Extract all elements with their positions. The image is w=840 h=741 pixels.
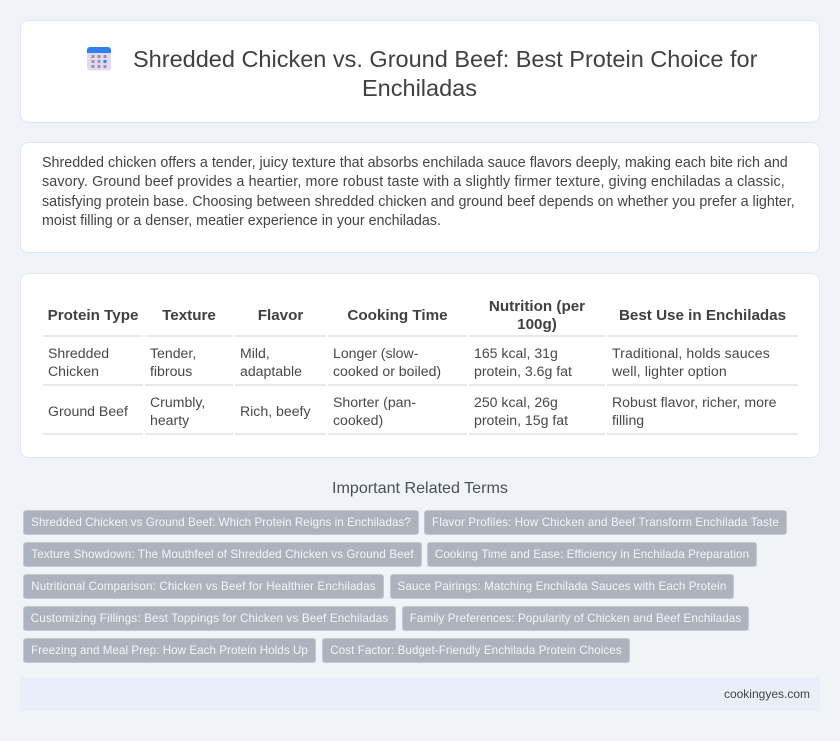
tag: Freezing and Meal Prep: How Each Protein Holds Up (31, 644, 308, 657)
row: shredded chicken: Traditional, holds sauces (612, 345, 770, 361)
row: shredded chicken: Longer (slow- (333, 345, 418, 361)
icon: calendar (87, 47, 111, 70)
row: ground beef: hearty (150, 412, 189, 428)
title: Enchiladas (362, 75, 477, 101)
description text (42, 155, 795, 229)
table header: Protein Type (48, 307, 138, 324)
row: shredded chicken: Tender, (150, 345, 196, 361)
row: ground beef: cooked) (333, 412, 383, 428)
row: shredded chicken: fibrous (150, 363, 192, 379)
row: shredded chicken: adaptable (240, 363, 302, 379)
row: ground beef: Rich, beefy (240, 403, 311, 419)
row: shredded chicken (48, 345, 770, 379)
tag (23, 638, 316, 663)
row: shredded chicken: Chicken (48, 363, 99, 379)
panel: description (20, 142, 820, 253)
tag (402, 606, 749, 631)
tag: Family Preferences: Popularity of Chicken and Beef Enchiladas (410, 612, 741, 625)
row: shredded chicken: Shredded (48, 345, 109, 361)
panel: comparison table (20, 273, 820, 458)
row: ground beef: Ground Beef (48, 403, 128, 419)
table header: Nutrition (per (489, 298, 585, 315)
table header: Cooking Time (347, 307, 448, 324)
tag: Customizing Fillings: Best Toppings for Chicken vs Beef Enchiladas (31, 612, 388, 625)
tag (23, 510, 419, 535)
table header: Flavor (258, 307, 303, 324)
description text: satisfying protein base. Choosing between shredded chicken and ground beef depends on whether you prefer a lighter, (42, 194, 795, 210)
row: shredded chicken: 165 kcal, 31g (474, 345, 558, 361)
tag: Cost Factor: Budget-Friendly Enchilada Protein Choices (330, 644, 622, 657)
tag (23, 574, 384, 599)
tag (23, 542, 422, 567)
tag (390, 574, 734, 599)
row: ground beef: protein, 15g fat (474, 412, 568, 428)
row: ground beef: filling (612, 412, 644, 428)
row: ground beef: 250 kcal, 26g (474, 394, 558, 410)
row: ground beef: Shorter (pan- (333, 394, 416, 410)
row: ground beef: Robust flavor, richer, more (612, 394, 776, 410)
tag: Sauce Pairings: Matching Enchilada Sauces with Each Protein (398, 580, 726, 593)
row: shredded chicken: well, lighter option (612, 363, 727, 379)
panel: header (20, 20, 820, 123)
table header: Texture (162, 307, 216, 324)
table header: 100g) (517, 316, 557, 333)
description text: Shredded chicken offers a tender, juicy texture that absorbs enchilada sauce flavors deeply, making each bite rich and (42, 155, 788, 171)
tag (322, 638, 630, 663)
footer credit: cookingyes.com (724, 687, 810, 701)
tag: Cooking Time and Ease: Efficiency in Enchilada Preparation (435, 548, 749, 561)
row: shredded chicken: Mild, (240, 345, 270, 361)
tag: Texture Showdown: The Mouthfeel of Shredded Chicken vs Ground Beef (31, 548, 414, 561)
description text: moist filling or a denser, meatier experience in your enchiladas. (42, 213, 441, 229)
tag (424, 510, 787, 535)
table header: Best Use in Enchiladas (619, 307, 786, 324)
title: Shredded Chicken vs. Ground Beef: Best Protein Choice for (133, 46, 757, 72)
row: ground beef: Crumbly, (150, 394, 205, 410)
heading: related terms: Important Related Terms (332, 479, 508, 497)
tag list (23, 510, 787, 663)
tag (427, 542, 757, 567)
tag: Flavor Profiles: How Chicken and Beef Transform Enchilada Taste (432, 516, 779, 529)
title (133, 46, 758, 101)
tag: Shredded Chicken vs Ground Beef: Which Protein Reigns in Enchiladas? (31, 516, 411, 529)
tag: Nutritional Comparison: Chicken vs Beef for Healthier Enchiladas (31, 580, 376, 593)
tag (23, 606, 396, 631)
row: shredded chicken: cooked or boiled) (333, 363, 441, 379)
description text: savory. Ground beef provides a heartier, more robust taste with a slightly firmer texture, giving enchiladas a classic, (42, 174, 785, 190)
table header (48, 298, 786, 333)
row: shredded chicken: protein, 3.6g fat (474, 363, 572, 379)
footer (20, 678, 820, 711)
row: ground beef (48, 394, 776, 428)
